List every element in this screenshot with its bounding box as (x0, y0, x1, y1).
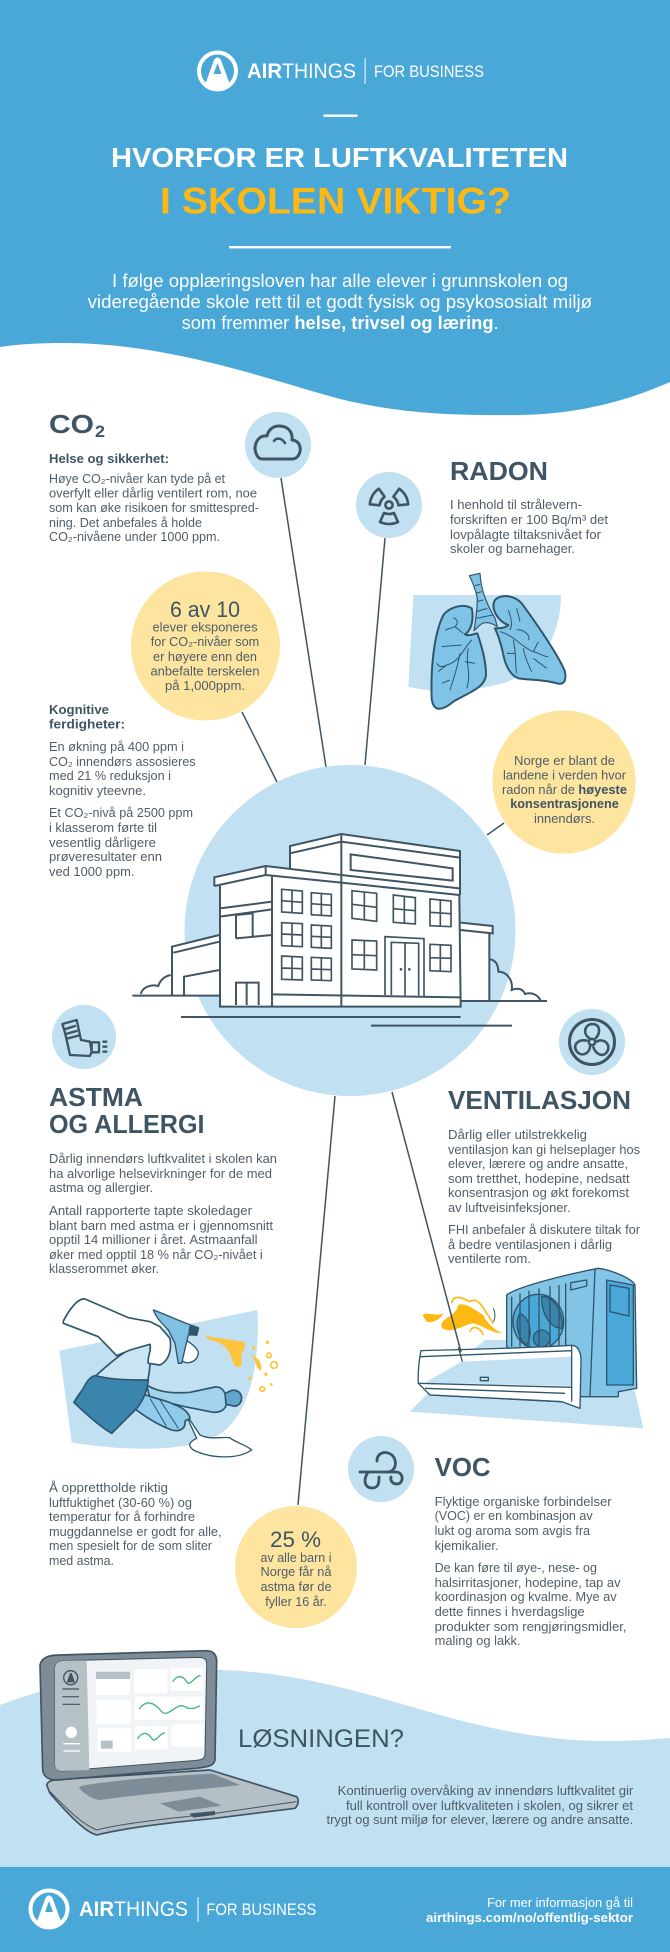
callout: 25 %: fyller 16 år. (265, 1594, 327, 1609)
text: luftfuktighet: muggdannelse er godt for alle, (49, 1524, 222, 1539)
logo: Airthings for business: FOR BUSINESS (374, 63, 484, 81)
text: more information (426, 1895, 633, 1925)
text: løsningen (326, 1783, 634, 1827)
text: Helse og sikkerhet: overfylt eller dårlig ventilert rom, noe (49, 486, 257, 500)
callout: 6 av 10: på 1,000ppm. (165, 678, 245, 693)
text: voc: halsirritasjoner, hodepine, tap av (435, 1575, 621, 1590)
heading: astma og allergi: OG ALLERGI (49, 1109, 204, 1139)
text: ventilasjon: elever, lærere og andre ansatte, (448, 1156, 628, 1171)
text: astma: klasserommet øker. (49, 1261, 159, 1276)
text: voc: De kan føre til øye-, nese- og (435, 1560, 597, 1575)
text: løsningen: full kontroll over luftkvaliteten i skolen, og sikrer et (346, 1798, 633, 1813)
heading: voc: VOC (435, 1452, 491, 1482)
title: HVORFOR ER LUFTKVALITETEN (111, 142, 568, 173)
logo: footer: AIR (79, 1898, 114, 1921)
text: voc: Flyktige organiske forbindelser (435, 1494, 612, 1509)
text: luftfuktighet: Å opprettholde riktig (49, 1480, 168, 1495)
text: radon: I henhold til strålevern- (450, 497, 582, 512)
heading: astma og allergi: ASTMA (49, 1082, 143, 1112)
callout: 25 %: Norge får nå (260, 1564, 332, 1579)
text: Kognitive ferdigheter: En økning på 400 ppm i (49, 739, 184, 754)
callout: 25 %: astma før de (260, 1579, 332, 1594)
text: luftfuktighet: med astma. (49, 1553, 114, 1568)
text: Kognitive ferdigheter: Et CO₂-nivå på 2500 ppm (49, 805, 193, 820)
logo: footer: FOR BUSINESS (206, 1901, 316, 1919)
heading: CO2: 2 (95, 422, 105, 441)
callout: 6 av 10: er høyere enn den (153, 649, 257, 664)
text: luftfuktighet: luftfuktighet (30-60 %) og (49, 1495, 192, 1510)
text: radon: lovpålagte tiltaksnivået for (450, 527, 602, 542)
text: more information: airthings.com/no/offentlig-sektor (426, 1910, 633, 1925)
icon: radiation (356, 472, 422, 538)
panel: radon (356, 456, 636, 854)
callout: radon concentrations: innendørs. (534, 811, 595, 826)
illustration: school building (132, 834, 547, 1026)
intro text: I følge opplæringsloven har alle elever i grunnskolen og (112, 271, 568, 291)
title: I SKOLEN VIKTIG? (160, 180, 511, 222)
illustration: laptop (40, 1651, 298, 1835)
text: Kognitive ferdigheter: med 21 % reduksjon i (49, 768, 171, 783)
text: astma: blant barn med astma er i gjennomsnitt (49, 1218, 273, 1233)
text: voc: produkter som rengjøringsmidler, (435, 1619, 627, 1634)
text: voc: koordinasjon og kvalme. Mye av (435, 1589, 617, 1604)
illustration: air conditioner (410, 1268, 643, 1428)
callout: 25 %: av alle barn i (260, 1550, 332, 1565)
title (111, 142, 568, 222)
text: løsningen: trygt og sunt miljø for elever, lærere og andre ansatte. (326, 1812, 633, 1827)
callout: 6 av 10 (131, 572, 280, 720)
text: voc: dette finnes i hverdagslige (435, 1604, 585, 1619)
text: Helse og sikkerhet: som kan øke risikoen for smittespred- (49, 500, 259, 515)
text: ventilasjon (448, 1127, 641, 1266)
text: more information: For mer informasjon gå til (487, 1895, 633, 1910)
logo: Airthings for business: THINGS (282, 60, 356, 83)
heading: ventilasjon: VENTILASJON (448, 1085, 631, 1115)
logo: footer: THINGS (114, 1898, 188, 1921)
intro text (88, 271, 592, 333)
text: radon: forskriften er 100 Bq/m³ det (450, 512, 608, 527)
text: voc: (VOC) er en kombinasjon av (435, 1508, 593, 1523)
text: ventilasjon: å bedre ventilasjonen i dårlig (448, 1237, 612, 1252)
logo: Airthings for business (199, 52, 484, 90)
text: Helse og sikkerhet: Høye CO₂-nivåer kan tyde på et (49, 471, 225, 486)
text: astma (49, 1151, 277, 1276)
panel: løsningen (0, 1651, 670, 1867)
text: ventilasjon: som tretthet, hodepine, nedsatt (448, 1171, 630, 1186)
icon: fan (559, 1009, 625, 1075)
text: astma: Antall rapporterte tapte skoledager (49, 1203, 253, 1218)
text: Helse og sikkerhet: ning. Det anbefales å holde (49, 515, 202, 530)
text: Kognitive ferdigheter: kognitiv yteevne. (49, 783, 146, 798)
connector: ventilation line (392, 1092, 461, 1352)
logo: footer (30, 1890, 316, 1928)
text: voc: kjemikalier. (435, 1538, 499, 1553)
text: ventilasjon: av luftveisinfeksjoner. (448, 1200, 571, 1215)
panel: CO2 (49, 409, 311, 879)
callout: radon concentrations: Norge er blant de (514, 753, 615, 768)
text: løsningen: Kontinuerlig overvåking av innendørs luftkvalitet gir (338, 1783, 634, 1798)
callout: radon concentrations (492, 710, 636, 854)
callout: radon concentrations: landene i verden hvor (503, 768, 627, 782)
text: ventilasjon: Dårlig eller utilstrekkelig (448, 1127, 587, 1142)
text: Kognitive ferdigheter: Kognitive (49, 702, 109, 717)
central circle (184, 765, 516, 1096)
text: luftfuktighet: temperatur for å forhindre (49, 1509, 195, 1524)
icon: wind (348, 1436, 414, 1502)
callout: 6 av 10: anbefalte terskelen (150, 664, 260, 678)
heading: radon: RADON (450, 456, 548, 486)
illustration: lungs (408, 573, 565, 709)
text: Helse og sikkerhet (49, 451, 259, 544)
callout: 6 av 10: elever eksponeres (152, 620, 258, 634)
callout: 6 av 10: 6 av 10 (170, 597, 240, 622)
text: voc: maling og lakk. (435, 1633, 521, 1648)
text: ventilasjon: ventilerte rom. (448, 1251, 531, 1266)
heading: CO2 (49, 409, 105, 441)
panel: footer (0, 1867, 670, 1952)
text: Helse og sikkerhet: CO₂-nivåene under 1000 ppm. (49, 529, 220, 544)
text: Kognitive ferdigheter: CO₂ innendørs assosieres (49, 754, 196, 769)
icon: inhaler (52, 1005, 116, 1069)
text: Kognitive ferdigheter: vesentlig dårligere (49, 835, 156, 850)
heading: astma og allergi (49, 1082, 204, 1139)
panel: voc (348, 1436, 627, 1648)
callout: 25 %: 25 % (270, 1527, 321, 1552)
heading: løsningen: LØSNINGEN? (238, 1725, 404, 1753)
text: astma: ha alvorlige helsevirkninger for de med (49, 1166, 272, 1181)
text: Kognitive ferdigheter: prøveresultater enn (49, 849, 162, 864)
connector lines (242, 478, 504, 1505)
text: radon (450, 497, 608, 556)
callout: 25 % (235, 1506, 357, 1628)
text: ventilasjon: FHI anbefaler å diskutere tiltak for (448, 1222, 641, 1237)
text: astma: opptil 14 millioner i året. Astmaanfall (49, 1232, 258, 1247)
callout: radon concentrations: konsentrasjonene (510, 796, 619, 811)
text: Kognitive ferdigheter: i klasserom førte til (49, 820, 157, 835)
text: Kognitive ferdigheter: ved 1000 ppm. (49, 864, 134, 879)
text: Kognitive ferdigheter (49, 702, 196, 879)
text: Helse og sikkerhet: Helse og sikkerhet: (49, 451, 169, 466)
text: Kognitive ferdigheter: ferdigheter: (49, 716, 125, 732)
text: luftfuktighet (49, 1480, 222, 1568)
text: astma: astma og allergier. (49, 1180, 153, 1195)
text: voc (435, 1494, 627, 1648)
heading: CO2: CO (49, 409, 94, 439)
text: astma: Dårlig innendørs luftkvalitet i skolen kan (49, 1151, 277, 1166)
text: luftfuktighet: men spesielt for de som sliter (49, 1538, 213, 1553)
header panel (0, 0, 670, 415)
intro text: som fremmer helse, trivsel og læring. (182, 313, 499, 333)
logo: Airthings for business: AIR (247, 60, 282, 83)
text: radon: skoler og barnehager. (450, 541, 575, 556)
callout: 6 av 10: for CO₂-nivåer som (151, 634, 259, 649)
icon: cloud (245, 412, 311, 478)
text: astma: øker med opptil 18 % når CO₂-nivået i (49, 1247, 263, 1262)
text: ventilasjon: ventilasjon kan gi helseplager hos (448, 1142, 640, 1157)
callout: radon concentrations: radon når de høyeste (502, 782, 627, 797)
panel: astma og allergi (49, 1005, 357, 1628)
intro text: videregående skole rett til et godt fysisk og psykososialt miljø (88, 292, 592, 312)
text: voc: lukt og aroma som avgis fra (435, 1523, 591, 1538)
text: ventilasjon: konsentrasjon og økt forekomst (448, 1185, 629, 1200)
panel: ventilasjon (392, 1009, 643, 1428)
illustration: cleaning products (59, 1299, 277, 1457)
